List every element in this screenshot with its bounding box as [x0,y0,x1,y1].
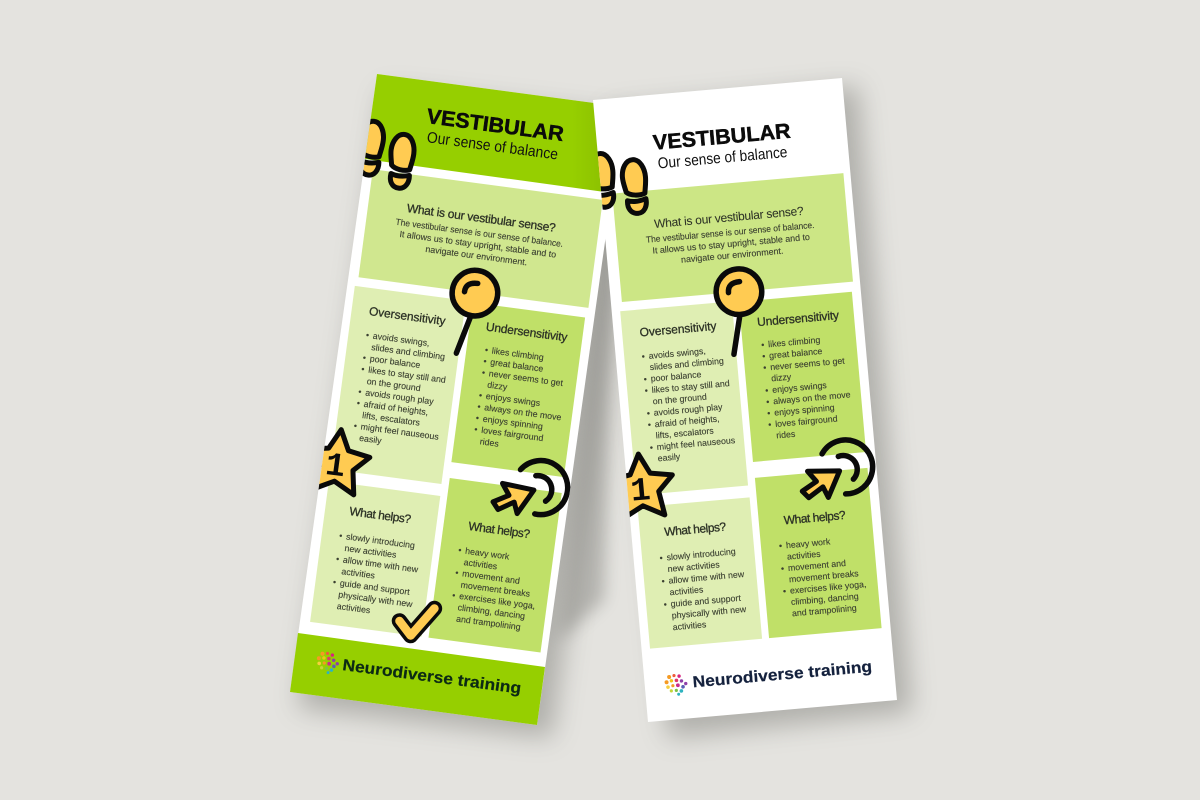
list: undersensitivity: • [762,351,766,361]
list: oversensitivity: • [358,386,362,397]
list: what helps left: • [659,553,663,563]
panel: oversensitivity [620,301,748,495]
heading: what is: What is our vestibular sense? [654,204,804,231]
heading: oversensitivity: Oversensitivity [639,319,717,340]
right card icons [598,151,876,518]
list: undersensitivity: • [763,362,767,373]
logo mark [315,650,340,675]
panel: oversensitivity [330,286,466,484]
icon: magnifier [449,268,500,356]
list: what helps left: • [339,530,343,541]
list: what helps left [329,530,422,621]
list: what helps left: physically with new [671,604,747,621]
list: undersensitivity: enjoys swings [485,391,541,408]
list: what helps right: movement and [788,558,846,573]
list: undersensitivity: loves fairground [775,414,838,429]
list: what helps right [449,545,542,634]
list: undersensitivity: enjoys spinning [482,414,544,432]
list: what helps right: • [452,590,456,600]
footer band [290,633,545,725]
list: oversensitivity: poor balance [369,353,421,370]
list: what helps right: heavy work [465,546,511,562]
icon: arrow with arcs [798,438,875,500]
list: undersensitivity: loves fairground [481,425,544,443]
list: undersensitivity: • [766,397,770,407]
list: what helps left [659,546,749,633]
list: what helps right: exercises like yoga, [459,591,536,611]
list: oversensitivity: • [649,442,653,453]
list: oversensitivity: • [361,364,365,374]
list: oversensitivity: slides and climbing [371,342,446,362]
footer logo [315,650,523,700]
list: what helps right: and trampolining [456,614,521,632]
list: undersensitivity [761,332,854,441]
list: undersensitivity: rides [479,436,500,449]
list: what helps right [779,534,869,619]
list: oversensitivity: poor balance [650,369,702,384]
list: oversensitivity: might feel nauseous [656,435,736,452]
list: what helps right: • [779,541,782,551]
list: what helps right: • [783,586,787,596]
icon: star number one [318,427,372,498]
list: what helps right: movement and [462,568,521,586]
intro text: It allows us to stay upright, stable and to [652,232,810,256]
panel: what helps left [310,481,440,637]
icon: arrow with arcs [492,455,571,520]
heading: undersensitivity: Undersensitivity [485,320,568,344]
list: undersensitivity: enjoys swings [772,380,828,395]
panel: what helps right [755,468,882,638]
icon: footprint right [621,159,649,214]
heading: what helps left: What helps? [664,520,727,539]
icon: footprint left [598,151,616,210]
list: undersensitivity: • [478,390,483,400]
subtitle: Our sense of balance [657,144,788,172]
panel: what is our vestibular sense [358,169,603,308]
list: what helps right: movement breaks [789,568,860,584]
panel: what helps right [429,478,562,653]
heading: what helps right: What helps? [783,508,846,527]
list: oversensitivity: lifts, escalators [655,425,715,441]
list: what helps right: • [781,563,784,574]
list: what helps right: climbing, dancing [791,591,859,607]
list: undersensitivity: never seems to get [488,368,564,388]
list: what helps right: and trampolining [792,603,857,618]
list: undersensitivity: • [481,367,486,378]
list: oversensitivity: on the ground [366,376,421,393]
panel: undersensitivity [451,303,585,477]
heading: undersensitivity: Undersensitivity [757,308,839,329]
intro text: navigate our environment. [681,246,784,265]
list: what helps left: new activities [667,559,721,574]
list: oversensitivity: • [362,352,367,363]
list: oversensitivity: • [356,398,361,408]
list: undersensitivity: • [475,413,480,423]
list: oversensitivity: might feel nauseous [360,422,440,442]
list: what helps left: • [661,576,665,586]
intro text: The vestibular sense is our sense of balance. [646,220,815,245]
list: what helps left: slowly introducing [346,531,416,550]
icon: footprint left [362,118,386,178]
footer logo [664,657,873,697]
list: oversensitivity: • [647,420,651,430]
list: what helps left: new activities [344,543,398,560]
list: what helps left: activities [669,584,704,597]
intro text [646,220,817,268]
list: oversensitivity: • [643,374,647,384]
list: undersensitivity: likes climbing [768,335,821,349]
logo wordmark: Neurodiverse training [341,657,522,698]
icon: check mark [398,604,434,638]
list: undersensitivity: • [474,424,478,434]
title: VESTIBULAR [425,105,565,146]
list: undersensitivity: rides [776,429,796,440]
list: undersensitivity: • [484,345,489,355]
list: what helps right: activities [787,549,822,562]
list: what helps left: • [663,599,667,610]
list: undersensitivity: • [768,419,772,430]
list: what helps right: climbing, dancing [457,602,526,621]
intro text [392,217,564,272]
list: oversensitivity: avoids rough play [653,402,723,418]
heading: what helps right: What helps? [468,519,531,541]
list: oversensitivity: • [353,421,358,431]
icon: magnifier [714,267,767,355]
title: VESTIBULAR [652,120,792,155]
card base [290,74,624,725]
icon: star number one [626,452,675,518]
logo mark [664,673,688,697]
list: what helps left: allow time with new [668,569,745,586]
left card contents [304,99,612,702]
list: what helps right: exercises like yoga, [790,579,867,596]
list: undersensitivity: • [477,401,481,412]
list: what helps left: activities [336,601,372,615]
list: what helps left: • [332,577,337,587]
panel: undersensitivity [739,292,866,462]
left card body [304,169,603,702]
list: what helps left: activities [341,566,376,581]
subtitle: Our sense of balance [426,129,559,163]
list: oversensitivity [641,344,737,464]
list: undersensitivity: always on the move [484,402,562,422]
card base [593,78,897,722]
card shadows [298,86,912,738]
right card: white version [575,78,897,724]
list: oversensitivity: avoids swings, [648,346,706,361]
list: oversensitivity: easily [359,433,383,446]
left card: green version [284,74,624,725]
panel: what helps left [638,497,762,649]
intro text: The vestibular sense is our sense of balance. [395,217,564,249]
list: what helps left: physically with new [338,589,414,609]
list: oversensitivity: afraid of heights, [654,414,720,429]
list: oversensitivity: easily [657,451,681,463]
list: oversensitivity: lifts, escalators [362,410,421,428]
logo wordmark: Neurodiverse training [692,659,873,691]
list: what helps left: guide and support [670,593,742,609]
list: what helps right: • [458,545,462,555]
header band [365,74,624,193]
heading: what is: What is our vestibular sense? [406,201,557,235]
list: undersensitivity: great balance [769,346,823,361]
icon: footprint right [386,133,416,190]
list: undersensitivity [472,345,570,457]
icon: star number one: 1 [629,472,652,511]
list: oversensitivity: likes to stay still and [368,365,447,385]
list: oversensitivity: • [646,408,650,418]
list: oversensitivity [352,330,452,453]
list: what helps left: guide and support [339,578,411,597]
list: oversensitivity: avoids swings, [372,331,430,348]
list: oversensitivity: afraid of heights, [363,399,429,417]
list: what helps right: activities [463,557,498,571]
list: what helps left: • [335,554,340,564]
list: oversensitivity: • [641,351,645,361]
list: undersensitivity: • [761,340,765,350]
list: what helps left: activities [672,619,707,632]
left card icons [318,118,570,644]
list: oversensitivity: • [644,385,648,396]
list: oversensitivity: • [365,330,370,340]
icon: star number one: 1 [323,447,348,486]
heading: oversensitivity: Oversensitivity [368,304,446,328]
list: undersensitivity: • [765,385,769,395]
list: undersensitivity: enjoys spinning [774,402,835,418]
list: what helps right: movement breaks [460,580,531,599]
heading: what helps left: What helps? [349,504,412,526]
list: undersensitivity: • [483,356,487,366]
list: what helps left: allow time with new [342,555,419,575]
list: what helps right: heavy work [786,536,831,550]
list: undersensitivity: likes climbing [491,346,544,362]
list: oversensitivity: on the ground [652,392,707,406]
list: what helps left: slowly introducing [666,546,736,562]
list: undersensitivity: great balance [490,357,544,374]
list: undersensitivity: dizzy [771,372,792,383]
list: undersensitivity: • [767,408,771,418]
list: oversensitivity: avoids rough play [365,387,435,406]
intro text: It allows us to stay upright, stable and to [399,229,557,260]
list: undersensitivity: always on the move [773,389,851,406]
intro text: navigate our environment. [425,244,528,267]
list: what helps right: • [455,567,459,578]
list: oversensitivity: likes to stay still and [651,378,730,395]
list: oversensitivity: slides and climbing [649,356,724,372]
list: undersensitivity: dizzy [487,380,509,392]
list: undersensitivity: never seems to get [770,355,846,372]
panel: what is our vestibular sense [612,173,853,302]
infographic mockup [288,74,923,748]
